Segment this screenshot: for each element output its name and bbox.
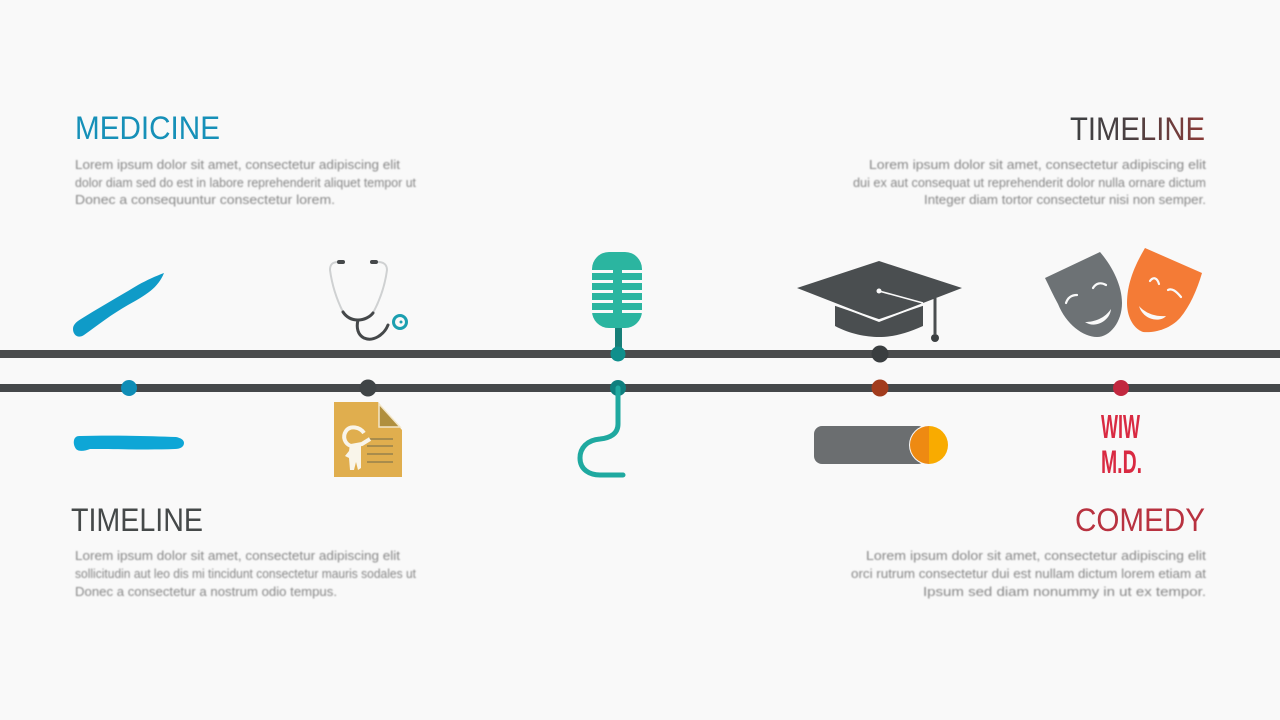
heading: timeline top right: TIMELINE <box>1070 111 1205 147</box>
text block: timeline description top right: dui ex aut consequat ut reprehenderit dolor nulla ornare dictum <box>853 175 1206 190</box>
marker: cigar <box>872 380 888 396</box>
icon: hooked cable <box>580 388 623 475</box>
icon: blue dash <box>74 436 184 451</box>
text block: medicine description: Donec a consequuntur consectetur lorem. <box>75 192 335 207</box>
text block: comedy description: Lorem ipsum dolor sit amet, consectetur adipiscing elit <box>866 548 1206 563</box>
icon: graduation cap <box>797 261 962 342</box>
text block: timeline description bottom left: Donec a consectetur a nostrum odio tempus. <box>75 584 337 599</box>
text block: timeline description top right: Lorem ipsum dolor sit amet, consectetur adipiscing elit <box>869 157 1206 172</box>
text block: timeline description top right: Integer diam tortor consectetur nisi non semper. <box>924 192 1206 207</box>
text block: comedy description: Ipsum sed diam nonummy in ut ex tempor. <box>923 584 1206 599</box>
panel: comedy text <box>851 502 1206 599</box>
text block: timeline description top right <box>853 157 1206 207</box>
text block: medicine description: Lorem ipsum dolor sit amet, consectetur adipiscing elit <box>75 157 400 172</box>
panel: timeline text top right <box>853 111 1206 207</box>
icon: red lettering <box>1101 408 1142 480</box>
text block: timeline description bottom left: Lorem ipsum dolor sit amet, consectetur adipiscing elit <box>75 548 400 563</box>
heading: timeline bottom left: TIMELINE <box>71 502 203 538</box>
icon: microphone <box>592 252 642 354</box>
marker: comedy <box>1113 380 1129 396</box>
marker: medicine <box>121 380 137 396</box>
icon: red lettering: WIW <box>1101 408 1140 445</box>
text block: medicine description: dolor diam sed do est in labore reprehenderit aliquet tempor ut <box>75 175 416 190</box>
marker: microphone upper <box>610 346 626 362</box>
timeline rail: upper <box>0 350 1280 358</box>
icon: scalpel blade <box>73 273 164 337</box>
icon: document with key <box>334 402 402 477</box>
marker: microphone lower <box>610 380 626 396</box>
text block: medicine description <box>75 157 416 207</box>
text block: timeline description bottom left: sollicitudin aut leo dis mi tincidunt consectetur mauris sodales ut <box>75 566 416 581</box>
icon: cigar pill <box>814 425 949 465</box>
marker: graduation cap <box>872 346 888 362</box>
icon: comedy and tragedy masks <box>1045 248 1202 337</box>
text block: timeline description bottom left <box>75 548 416 599</box>
heading: medicine: MEDICINE <box>75 110 220 146</box>
panel: medicine text <box>75 110 416 207</box>
panel: timeline text bottom left <box>71 502 416 599</box>
timeline rail: lower <box>0 384 1280 392</box>
text block: comedy description: orci rutrum consectetur dui est nullam dictum lorem etiam at <box>851 566 1206 581</box>
marker: document <box>360 380 376 396</box>
icon: stethoscope <box>330 260 406 339</box>
icon: red lettering: M.D. <box>1101 444 1142 480</box>
heading: comedy: COMEDY <box>1075 502 1205 538</box>
text block: comedy description <box>851 548 1206 599</box>
